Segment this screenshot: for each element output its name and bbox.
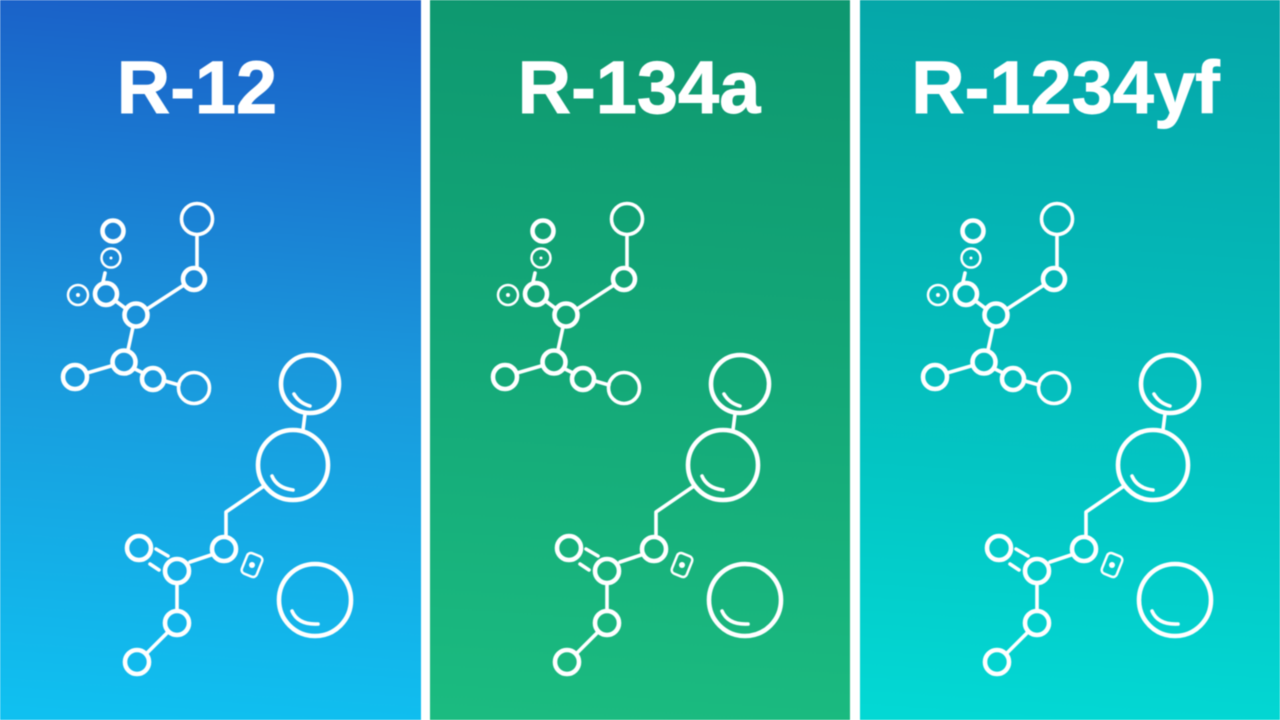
molecule diagram: R-12 [63,204,351,674]
panel: R-134a [430,0,850,720]
panel: R-1234yf [860,0,1280,720]
molecule diagram: R-1234yf [923,204,1211,674]
heading: R-134a: R-134a [518,46,761,129]
heading: R-12: R-12 [117,46,277,129]
molecule diagram: R-134a [493,204,781,674]
heading: R-1234yf: R-1234yf [911,46,1220,129]
panel: R-12 [0,0,421,720]
